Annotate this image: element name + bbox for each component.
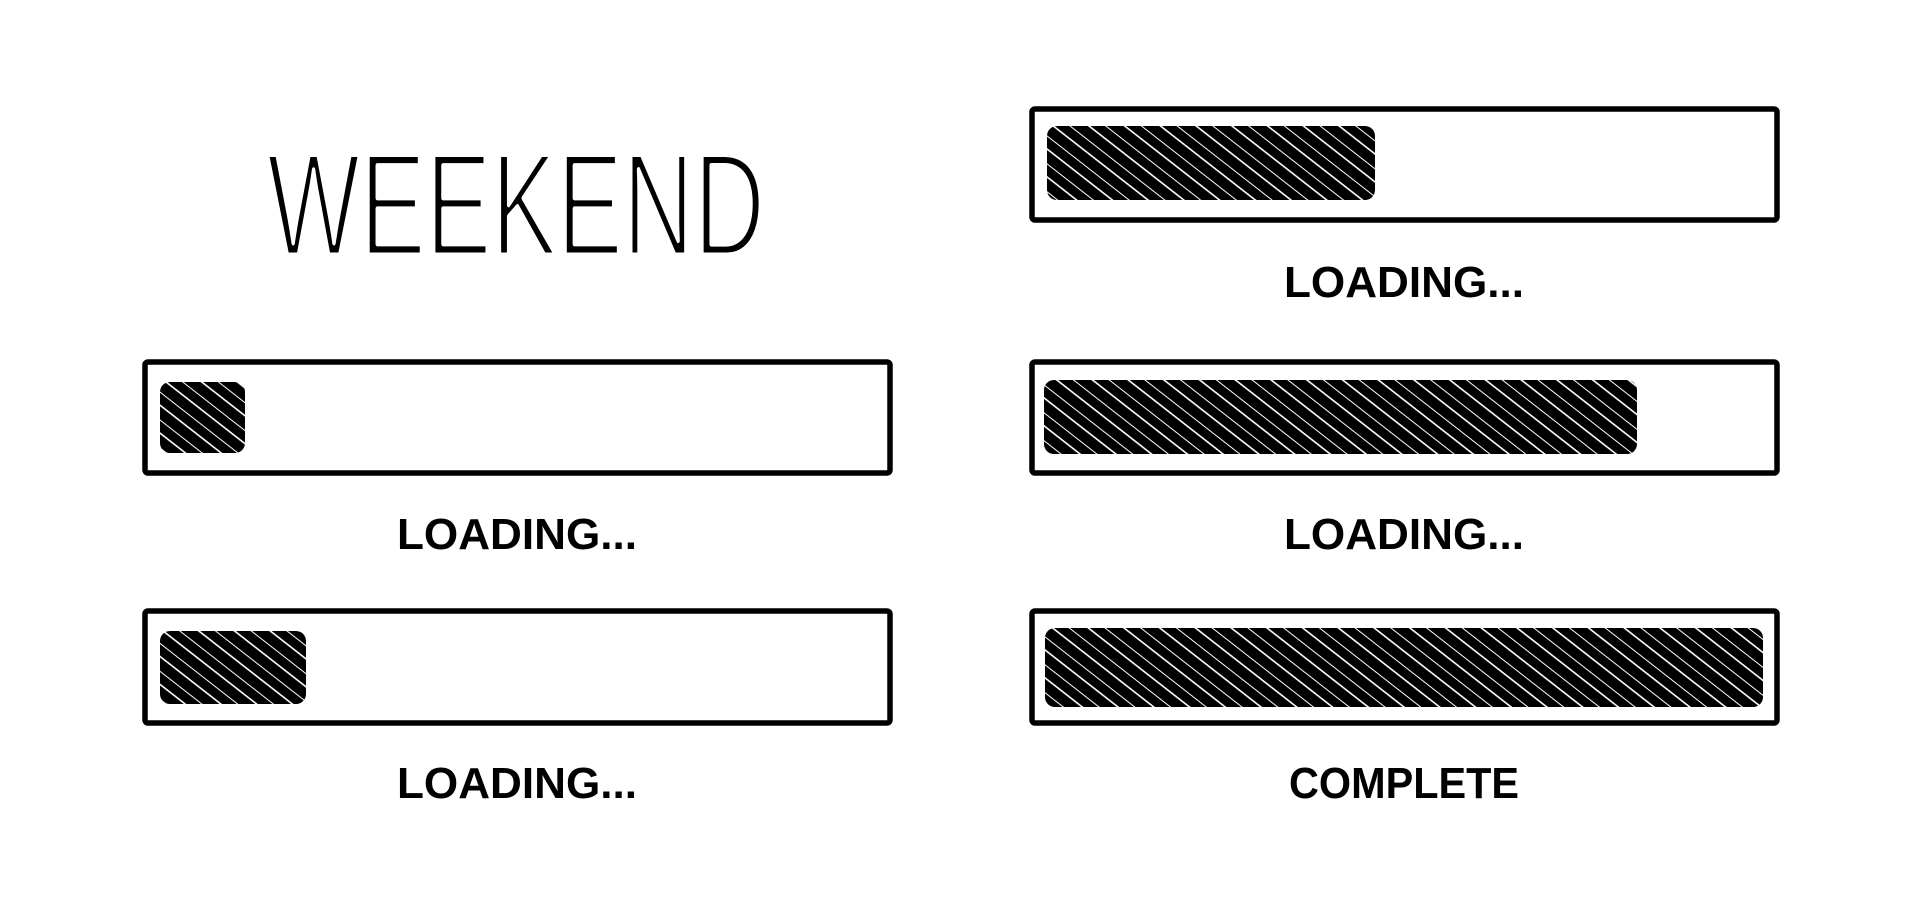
- label: left 2: LOADING...: [397, 759, 637, 808]
- progress bar: right 1: [1032, 109, 1777, 220]
- progress bar: right 3: [1032, 611, 1777, 723]
- label: left 1: LOADING...: [397, 510, 637, 559]
- label: right 3: COMPLETE: [1289, 759, 1519, 808]
- progress bar: left 2: [145, 611, 890, 723]
- label: right 2: LOADING...: [1284, 510, 1524, 559]
- title: WEEKEND: [267, 123, 765, 286]
- progress bar: right 2: [1032, 362, 1777, 473]
- label: right 1: LOADING...: [1284, 258, 1524, 307]
- progress bar: left 1: [145, 362, 890, 473]
